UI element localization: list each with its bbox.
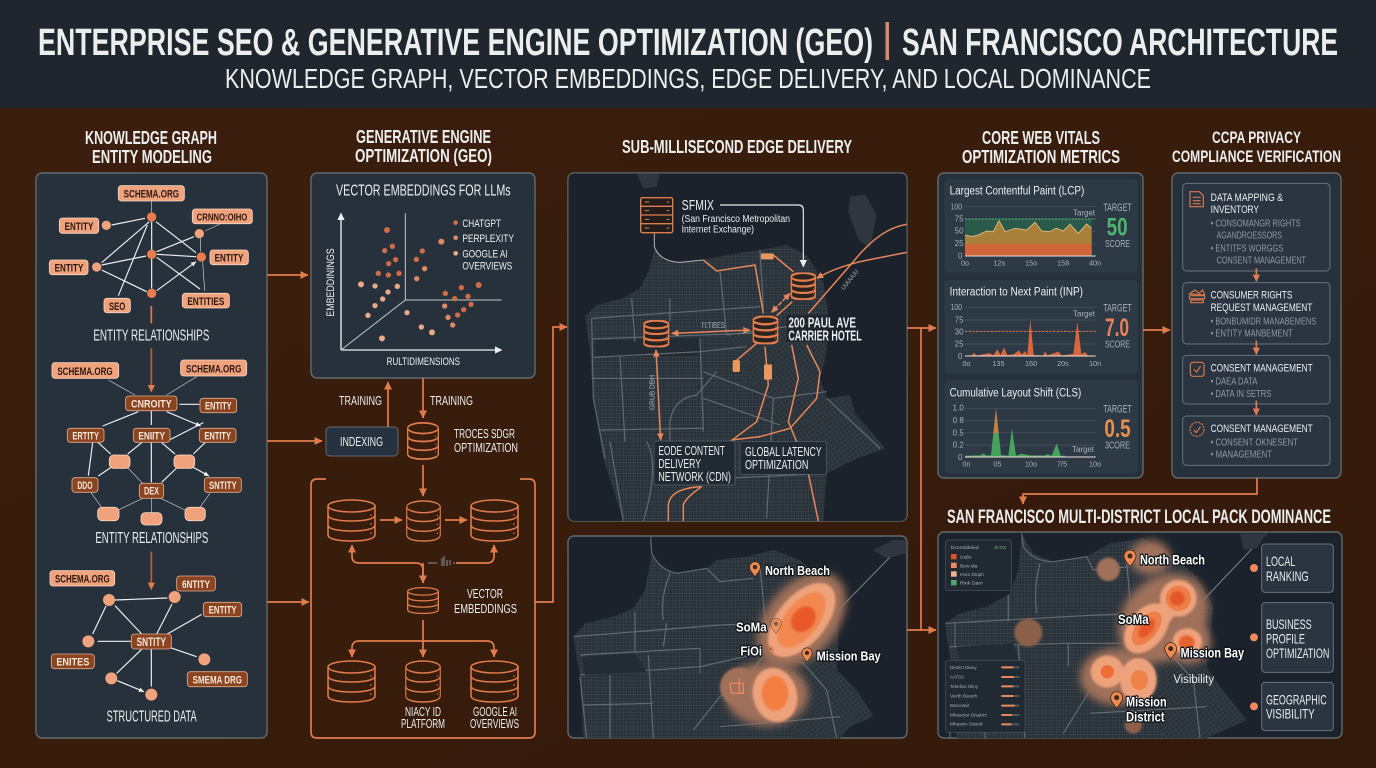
label: vector embeddings bbox=[454, 586, 517, 616]
district labels: Visibility bbox=[1173, 672, 1214, 686]
legend: PERPLEXITY bbox=[462, 233, 514, 245]
map streets bbox=[592, 250, 880, 521]
heading: core web vitals: OPTIMIZATION METRICS bbox=[962, 147, 1120, 167]
graph: top entity graph: ENTITY bbox=[205, 401, 232, 413]
panel: local pack dominance bbox=[938, 532, 1342, 738]
card: LCP: 158 bbox=[1057, 258, 1069, 267]
label: vector embeddings: EMBEDDINGS bbox=[454, 601, 517, 616]
graph: structured data: ENITES bbox=[56, 657, 89, 669]
label: entity relationships 2: ENTITY RELATIONSHIPS bbox=[95, 530, 208, 547]
graph: top entity graph: ENTITIES bbox=[187, 296, 225, 308]
card: LCP: Target bbox=[1073, 208, 1096, 217]
step: data mapping: DATA MAPPING & bbox=[1211, 192, 1283, 204]
callout: latency: GLOBAL LATENCY bbox=[745, 444, 822, 459]
card: INP bbox=[944, 280, 1138, 374]
graph: structured data: SCHEMA.ORG bbox=[55, 574, 110, 586]
district labels bbox=[1118, 551, 1244, 725]
district labels: Mission Bay bbox=[1181, 644, 1244, 660]
card: LCP: 15o bbox=[1025, 258, 1037, 267]
map pins bbox=[1111, 550, 1177, 708]
label: entity relationships: ENTITY RELATIONSHIPS bbox=[93, 328, 209, 345]
heat zones bbox=[1014, 540, 1226, 734]
step: data mapping: CONSENT MANAGEMENT bbox=[1217, 255, 1306, 266]
step: consent management bbox=[1183, 355, 1330, 404]
card: CLS: 0n bbox=[962, 460, 970, 469]
header band bbox=[0, 0, 1376, 108]
heading: edge delivery: SUB-MILLISECOND EDGE DELIVERY bbox=[622, 137, 852, 157]
scatter points bbox=[358, 227, 482, 341]
flow: training and indexing bbox=[326, 378, 518, 496]
graph: top entity graph bbox=[49, 186, 252, 426]
card: INP: 0 bbox=[958, 352, 963, 361]
step: consent management: CONSENT MANAGEMENT bbox=[1211, 363, 1313, 375]
indexing box: INDEXING bbox=[340, 434, 383, 449]
card: CLS: TARGET bbox=[1103, 404, 1132, 416]
scatter axes bbox=[341, 213, 502, 350]
label: platform: PLATFORM bbox=[401, 717, 445, 731]
label: platform bbox=[401, 705, 445, 731]
card: INP: 25 bbox=[955, 340, 964, 349]
graph: structured data bbox=[50, 571, 247, 701]
card: CLS: 10o bbox=[1089, 460, 1101, 469]
graph: top entity graph: ENTITY bbox=[55, 263, 84, 275]
label: SFMIX bbox=[682, 198, 790, 236]
flow: training and indexing: TRAINING bbox=[430, 393, 473, 408]
district ranking list: Tehefios Gliny bbox=[950, 684, 978, 690]
panel: core web vitals bbox=[938, 173, 1143, 478]
card: LCP: 40n bbox=[1089, 258, 1101, 267]
legend: GOOGLE AI bbox=[462, 249, 508, 261]
label: google ai overviews bbox=[470, 705, 519, 731]
card: LCP: 50 bbox=[955, 227, 964, 236]
legend: Dxontdibited bbox=[951, 545, 979, 551]
graph: top entity graph: CNROITY bbox=[131, 399, 172, 411]
district labels bbox=[736, 563, 881, 664]
card: LCP bbox=[944, 179, 1138, 273]
district labels: FiOi bbox=[740, 644, 762, 659]
panel: database pipeline bracket bbox=[311, 479, 535, 738]
heat zones bbox=[720, 555, 864, 727]
graph: middle entity graph: ENIITY bbox=[138, 431, 166, 443]
district ranking list: Mhasnic Distutt bbox=[950, 722, 983, 728]
label: platform: NIACY ID bbox=[405, 705, 441, 719]
district ranking list bbox=[946, 661, 1025, 732]
heading: GEO: GENERATIVE ENGINE bbox=[356, 127, 491, 147]
card: LCP: 0o bbox=[961, 258, 969, 267]
step: consumer rights: CONSUMER RIGHTS bbox=[1211, 290, 1293, 302]
label: carrier hotel: CARRIER HOTEL bbox=[788, 328, 862, 344]
legend: CHATGPT bbox=[462, 218, 501, 230]
graph: middle entity graph bbox=[50, 423, 247, 725]
label: google ai overviews: OVERVIEWS bbox=[470, 717, 519, 731]
card: business profile: OPTIMIZATION bbox=[1266, 646, 1329, 661]
district labels: District bbox=[1126, 709, 1165, 725]
card: LCP: 75 bbox=[955, 215, 964, 224]
graph: structured data: SNTITY bbox=[137, 635, 166, 649]
legend: Rink Dam bbox=[960, 581, 983, 587]
database: vector embeddings bbox=[408, 588, 438, 613]
map pins bbox=[750, 562, 812, 662]
district labels: Mission bbox=[1126, 694, 1167, 710]
card: INP: 20s bbox=[1057, 359, 1069, 368]
fiber routes bbox=[654, 205, 907, 521]
heading: CCPA: CCPA PRIVACY bbox=[1212, 128, 1301, 147]
district ranking list: Bsecotair bbox=[950, 703, 970, 709]
map land bbox=[573, 550, 873, 738]
card: business profile bbox=[1250, 603, 1333, 672]
heading: CCPA bbox=[1172, 128, 1341, 166]
heading: GEO bbox=[355, 127, 492, 166]
card: INP: Target bbox=[1073, 310, 1096, 319]
card: CLS: 05 bbox=[993, 460, 1001, 469]
label: SFMIX: Internet Exchange) bbox=[682, 225, 754, 236]
map land bbox=[945, 533, 1247, 738]
card: CLS: 1.0 bbox=[953, 404, 964, 413]
step: consent verification: • CONSENT OKNESENT bbox=[1211, 437, 1298, 448]
card: CLS: 7/5 bbox=[1057, 460, 1067, 469]
step: consent management: • DAEA DATA bbox=[1211, 377, 1258, 388]
step: consent verification: CONSENT MANAGEMENT bbox=[1211, 423, 1313, 435]
small map labels: UUUUUU bbox=[840, 268, 861, 292]
panel title: VECTOR EMBEDDINGS FOR LLMs bbox=[336, 183, 511, 200]
main title: ENTERPRISE SEO & GENERATIVE ENGINE OPTIMIZATION (GEO) bbox=[38, 22, 873, 64]
databases row 1 bbox=[328, 500, 518, 541]
card: LCP: 12s bbox=[993, 258, 1005, 267]
callout: CDN: EODE CONTENT bbox=[658, 443, 725, 458]
graph: top entity graph: SCHEMA.ORG bbox=[186, 363, 241, 375]
graph: middle entity graph: DDO bbox=[77, 480, 93, 492]
label: structured data: STRUCTURED DATA bbox=[107, 708, 197, 725]
small map labels bbox=[649, 268, 861, 410]
heading: GEO: OPTIMIZATION (GEO) bbox=[355, 146, 492, 166]
card: geographic visibility bbox=[1250, 682, 1333, 731]
card: INP: 30 bbox=[955, 327, 964, 336]
card: CLS: 3CORE bbox=[1105, 441, 1130, 452]
card: CLS: 0 8 bbox=[953, 416, 964, 425]
flow: training and indexing: OPTIMIZATION bbox=[454, 441, 518, 455]
panel: knowledge graph bbox=[36, 173, 267, 738]
step: consumer rights: • BONBUMIDR MANABEMENS bbox=[1211, 316, 1317, 327]
graph: top entity graph: SCHEMA.ORG bbox=[57, 366, 113, 378]
label: carrier hotel: 200 PAUL AVE bbox=[788, 316, 856, 332]
small map labels: GRUB DBH bbox=[649, 375, 656, 410]
step: consumer rights: REQUEST MANAGEMENT bbox=[1211, 302, 1312, 314]
label: carrier hotel bbox=[787, 315, 862, 344]
graph: structured data: ENTITY bbox=[209, 605, 237, 617]
panel: edge delivery map bbox=[568, 173, 907, 521]
card: geographic visibility: VISIBILITY bbox=[1266, 707, 1315, 722]
graph: structured data: 6NTITY bbox=[182, 579, 210, 591]
card: CLS bbox=[944, 381, 1138, 473]
card: INP: SCORE bbox=[1105, 340, 1130, 351]
card: INP: 10n bbox=[1089, 359, 1101, 368]
card: business profile: PROFILE bbox=[1266, 632, 1305, 647]
flow: training and indexing: TRAINING bbox=[339, 393, 382, 408]
databases row 2 bbox=[328, 661, 518, 702]
step: data mapping: • ENTITFS WORGGS bbox=[1211, 243, 1284, 254]
legend: UaBs bbox=[960, 555, 972, 561]
graph: top entity graph: ENTITY bbox=[65, 221, 94, 233]
step: consent verification: • MANAGEMENT bbox=[1211, 450, 1272, 461]
label: SFMIX: SFMIX bbox=[682, 198, 714, 214]
card: INP: 100 bbox=[951, 303, 962, 312]
card: INP: Interaction to Next Paint (INP) bbox=[950, 285, 1083, 299]
district labels: North Beach bbox=[1140, 551, 1205, 567]
label: vector embeddings: VECTOR bbox=[467, 586, 503, 601]
heading: core web vitals: CORE WEB VITALS bbox=[982, 128, 1100, 148]
card: LCP: 50 bbox=[1107, 214, 1128, 241]
step: data mapping: AGANDROESSORS bbox=[1217, 231, 1282, 242]
card: CLS: 0.5 bbox=[953, 428, 964, 437]
card: CLS: 0 bbox=[958, 453, 963, 462]
graph: top entity graph: ENTITY bbox=[215, 253, 244, 265]
label: SFMIX: (San Francisco Metropolitan bbox=[682, 214, 790, 225]
graph: middle entity graph: ENTITY bbox=[204, 431, 231, 443]
legend: Bew dia bbox=[960, 563, 978, 569]
graph: top entity graph: SEO bbox=[109, 301, 125, 313]
card: CLS: Cumulative Layout Shift (CLS) bbox=[950, 385, 1081, 399]
graph: middle entity graph: ERTITY bbox=[72, 431, 99, 443]
heading: knowledge graph bbox=[85, 128, 217, 167]
legend: OVERVIEWS bbox=[462, 261, 513, 273]
subtitle: KNOWLEDGE GRAPH, VECTOR EMBEDDINGS, EDGE DELIVERY, AND LOCAL DOMINANCE bbox=[225, 63, 1151, 94]
arrow: graph to pipeline bbox=[267, 601, 309, 603]
card: INP: 160 bbox=[1025, 359, 1037, 368]
district ranking list: District Dioxy bbox=[950, 665, 977, 671]
card: LCP: SCORE bbox=[1105, 239, 1130, 250]
connector: edge delivery to vitals and local pack bbox=[907, 328, 936, 630]
card: CLS: Target bbox=[1072, 445, 1095, 454]
card: business profile: BUSINESS bbox=[1266, 617, 1312, 632]
callout: CDN: DELIVERY bbox=[658, 456, 701, 471]
icon: top database bbox=[408, 423, 438, 459]
legend: 6:03 bbox=[995, 545, 1006, 551]
card: local ranking: RANKING bbox=[1266, 569, 1309, 584]
district labels: SoMa bbox=[1118, 611, 1149, 627]
heading: knowledge graph: KNOWLEDGE GRAPH bbox=[85, 128, 217, 148]
district labels: North Beach bbox=[765, 563, 830, 578]
heading: knowledge graph: ENTITY MODELING bbox=[92, 147, 212, 167]
step: consumer rights bbox=[1183, 283, 1330, 344]
district ranking list: Mhasetor Disaticc bbox=[950, 712, 988, 718]
card: LCP: 100 bbox=[951, 202, 962, 211]
district ranking list: AATGS bbox=[950, 674, 965, 680]
label: google ai overviews: GOOGLE AI bbox=[473, 705, 517, 719]
callout: latency bbox=[740, 442, 827, 474]
graph: top entity graph: SCHEMA.ORG bbox=[124, 189, 179, 201]
card: LCP: 25 bbox=[955, 239, 964, 248]
district ranking list: Verth Beach bbox=[950, 693, 978, 699]
flow: training and indexing: TROCES SDGR bbox=[454, 427, 515, 441]
arrow: graph to indexing bbox=[267, 440, 322, 442]
connector: compliance to local pack bbox=[1023, 478, 1257, 504]
card: LCP: TARGET bbox=[1103, 202, 1132, 214]
district labels: Mission Bay bbox=[817, 649, 881, 664]
callout: CDN bbox=[654, 441, 735, 485]
step: data mapping bbox=[1183, 183, 1330, 271]
step: consumer rights: • ENTITY MANBEMENT bbox=[1211, 329, 1293, 340]
icon: SFMIX server bbox=[641, 198, 673, 233]
step: data mapping: • CONSOMANGR RIGHTS bbox=[1211, 219, 1301, 230]
panel: lower heatmap bbox=[568, 536, 907, 738]
axis label: x: RULTIDIMENSIONS bbox=[387, 356, 460, 368]
graph: middle entity graph: DEX bbox=[144, 486, 159, 498]
card: INP: 0o bbox=[962, 359, 970, 368]
databases on map bbox=[644, 273, 815, 347]
arrow: pipeline to edge delivery bbox=[535, 327, 567, 602]
card: INP: TARGET bbox=[1103, 303, 1132, 315]
card: LCP: 0 bbox=[958, 252, 963, 261]
callout: latency: OPTIMIZATION bbox=[745, 457, 808, 472]
card: CLS: 0.5 bbox=[1104, 416, 1131, 443]
callout: CDN: NETWORK (CDN) bbox=[658, 469, 731, 484]
graph: middle entity graph: SNTITY bbox=[209, 480, 237, 492]
card: LCP: Largest Contentful Paint (LCP) bbox=[950, 183, 1084, 197]
legend bbox=[453, 218, 514, 273]
card: CLS: 10o bbox=[1025, 460, 1037, 469]
arrow: graph to vector embeddings bbox=[267, 274, 308, 276]
panel: CCPA compliance bbox=[1172, 173, 1341, 478]
card: INP: 7.0 bbox=[1105, 315, 1129, 342]
axis label: y: EMBEDDININGS bbox=[325, 248, 337, 317]
card: INP: 135 bbox=[992, 359, 1005, 368]
step: consent management: • DATA IN SETRS bbox=[1211, 389, 1272, 400]
heading: core web vitals bbox=[962, 128, 1120, 167]
arrow: vitals to compliance bbox=[1143, 329, 1170, 331]
small map labels: I'I:TIBES bbox=[702, 321, 725, 330]
legend: Hom Dioph bbox=[960, 572, 984, 578]
card: INP: 75 bbox=[955, 316, 964, 325]
step: data mapping: INVENTORY bbox=[1211, 204, 1259, 216]
step: consent verification bbox=[1183, 416, 1330, 465]
district labels: SoMa bbox=[736, 619, 767, 634]
legend bbox=[946, 540, 1012, 591]
graph: structured data: SMEMA DRG bbox=[193, 674, 242, 686]
card: geographic visibility: GEOGRAPHIC bbox=[1266, 692, 1327, 707]
map land bbox=[585, 245, 885, 521]
card: local ranking bbox=[1250, 544, 1333, 592]
panel: vector embeddings chart bbox=[311, 173, 535, 378]
graph: top entity graph: CRNNO:OIHO bbox=[197, 212, 247, 223]
card: CLS: 0.2 bbox=[953, 441, 964, 450]
indexing box bbox=[326, 427, 398, 456]
card: local ranking: LOCAL bbox=[1266, 554, 1296, 569]
